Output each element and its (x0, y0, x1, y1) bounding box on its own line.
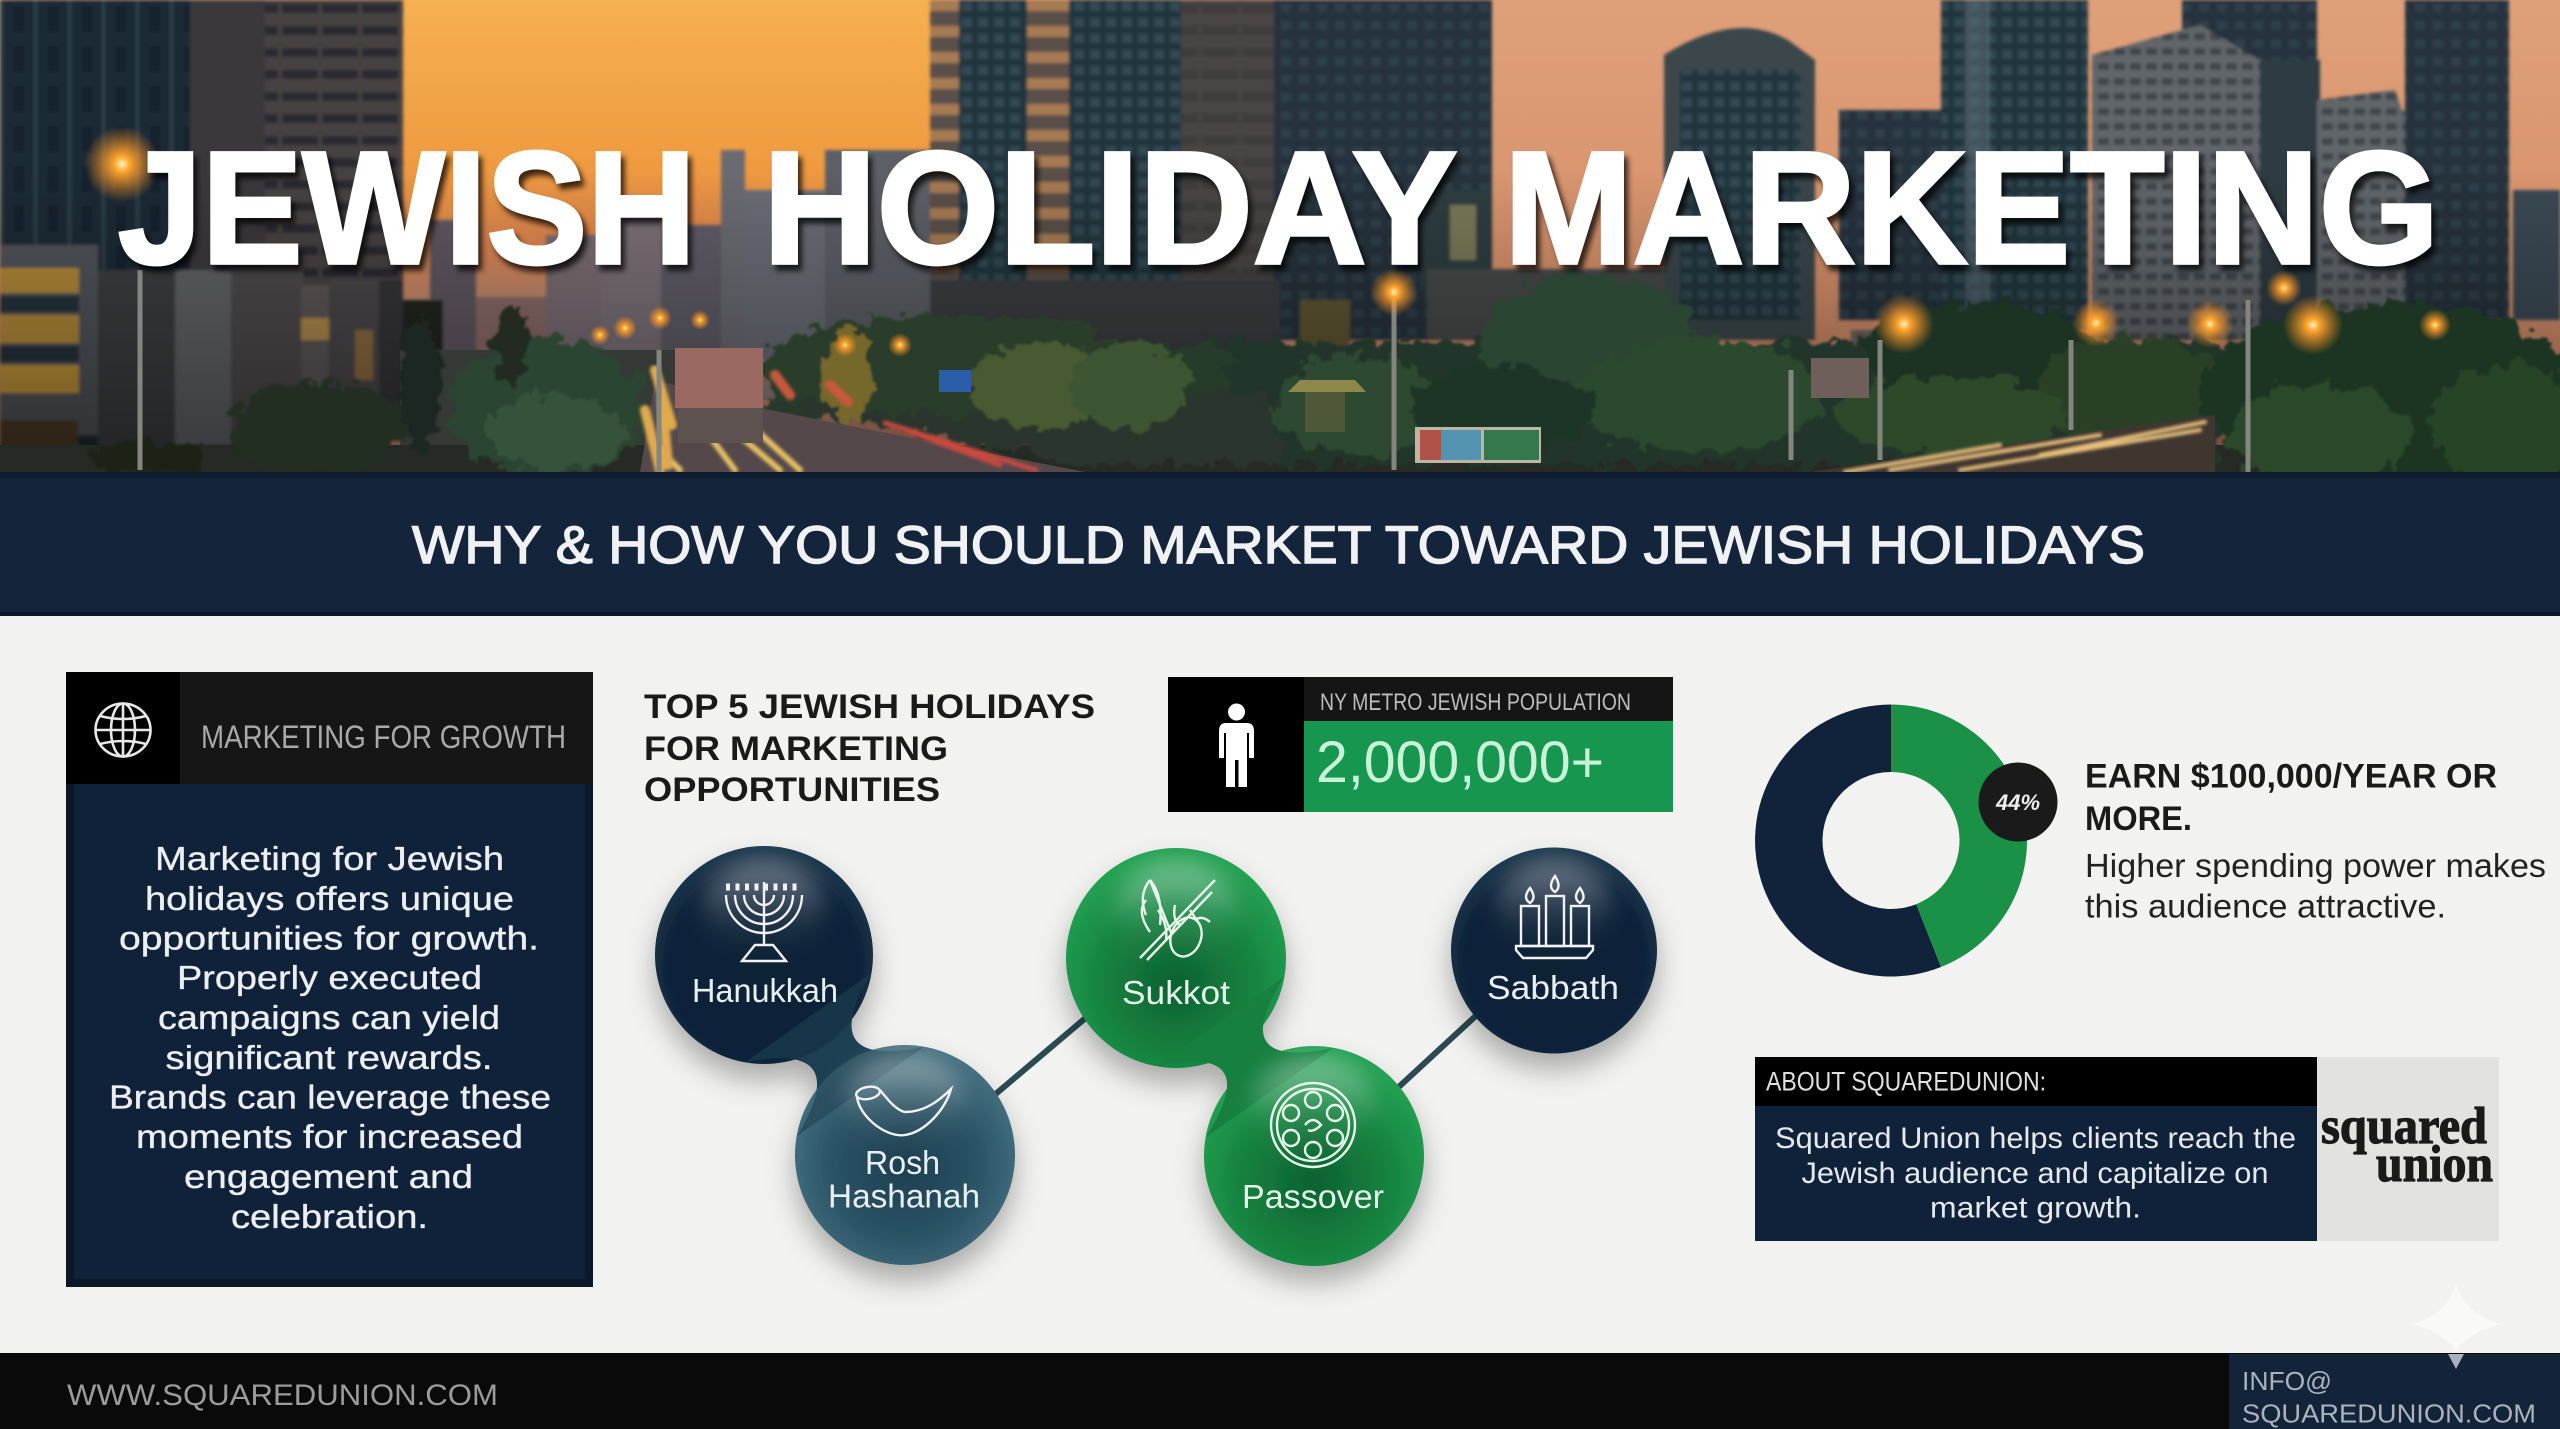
panel body text: significant rewards. (166, 1039, 492, 1076)
icon: shofar (855, 1085, 951, 1135)
panel body text: engagement and (184, 1158, 473, 1195)
panel body text: Properly executed (177, 959, 482, 996)
holiday: sukkot (1114, 861, 1238, 1011)
panel: marketing for growth (66, 672, 593, 1287)
panel body text: Brands can leverage these (109, 1078, 551, 1116)
callout: 44% badge: 44% (1995, 790, 2040, 815)
donut chart: 44% (1755, 704, 2058, 976)
subtitle band (0, 472, 2560, 616)
truck and road sign (675, 348, 763, 408)
heading: top 5 jewish holidays (644, 688, 1095, 809)
panel body text: opportunities for growth. (119, 920, 539, 957)
income stat text: Higher spending power makes (2085, 847, 2546, 884)
logo: squared union: union (2376, 1136, 2493, 1193)
holiday: passover (1242, 1057, 1384, 1215)
about body (1775, 1122, 2296, 1225)
callout: 44% badge (1978, 762, 2058, 842)
holiday: sabbath (1451, 848, 1657, 1054)
panel: NY metro population stat (1168, 677, 1673, 812)
icon: globe (96, 704, 150, 756)
label: Hanukkah (692, 972, 838, 1009)
icon: menorah (726, 882, 802, 961)
icon: lulav and etrog (1140, 880, 1215, 961)
panel body text (109, 840, 551, 1235)
footer email box: INFO@ (2242, 1366, 2332, 1396)
roads with light trails (640, 380, 1085, 472)
title (118, 118, 2439, 297)
label: Passover (1242, 1178, 1384, 1215)
about body: Jewish audience and capitalize on (1802, 1157, 2268, 1190)
panel body text: holidays offers unique (145, 880, 514, 917)
label: Sabbath (1487, 969, 1619, 1006)
holiday: sukkot and passover pair (1066, 848, 1424, 1266)
icon: seder plate (1271, 1083, 1355, 1167)
footer email box: SQUAREDUNION.COM (2242, 1399, 2536, 1429)
label: Sukkot (1122, 974, 1230, 1011)
holiday: hanukkah and rosh hashanah pair (655, 846, 1015, 1265)
income stat text: MORE. (2085, 800, 2192, 838)
heading: top 5 jewish holidays: OPPORTUNITIES (644, 771, 940, 809)
about heading: ABOUT SQUAREDUNION: (1766, 1067, 2046, 1097)
income stat text: EARN $100,000/YEAR OR (2085, 758, 2497, 796)
icon: candles (1516, 876, 1593, 958)
hero photo: city skyline at sunset (0, 0, 2560, 487)
about body: market growth. (1930, 1192, 2141, 1225)
label: Rosh (865, 1144, 940, 1181)
backdrops and trees (400, 350, 760, 472)
connector: passover to sabbath (1390, 1012, 1480, 1095)
about body: Squared Union helps clients reach the (1775, 1122, 2296, 1155)
street lights (84, 126, 160, 202)
logo: squared union (2317, 1057, 2499, 1241)
label (828, 1144, 980, 1214)
icon: sparkle watermark (2413, 1283, 2501, 1369)
holiday: hanukkah (692, 859, 838, 1009)
subtitle text: WHY & HOW YOU SHOULD MARKET TOWARD JEWISH HOLIDAYS (412, 516, 2145, 575)
footer email box (2229, 1354, 2560, 1429)
holiday: rosh hashanah (828, 1054, 980, 1214)
stat value: 2,000,000+ (1316, 730, 1604, 795)
title: JEWISH (118, 118, 696, 297)
stat label: NY METRO JEWISH POPULATION (1320, 689, 1631, 716)
label: Hashanah (828, 1178, 980, 1214)
panel: about squaredunion (1755, 1057, 2317, 1241)
connector: rosh hashanah to sukkot (985, 1010, 1095, 1103)
panel body text: Marketing for Jewish (155, 840, 504, 877)
billboards and signs (1415, 427, 1541, 463)
evening shading on lower buildings (0, 170, 2560, 472)
title: MARKETING (1504, 118, 2439, 297)
logo: squared union: squared (2321, 1098, 2487, 1155)
income stat text: this audience attractive. (2085, 888, 2446, 924)
icon: person (1219, 704, 1254, 787)
heading: top 5 jewish holidays: FOR MARKETING (644, 730, 948, 768)
panel body text: celebration. (231, 1198, 428, 1235)
heading: top 5 jewish holidays: TOP 5 JEWISH HOLIDAYS (644, 688, 1095, 726)
title: HOLIDAY (763, 118, 1457, 297)
footer website: WWW.SQUAREDUNION.COM (67, 1379, 498, 1412)
street light poles (140, 270, 2248, 472)
income stat text (2085, 758, 2546, 924)
panel heading: MARKETING FOR GROWTH (201, 719, 566, 755)
panel body text: campaigns can yield (158, 999, 500, 1036)
panel body text: moments for increased (136, 1118, 523, 1155)
footer (0, 1353, 2560, 1429)
